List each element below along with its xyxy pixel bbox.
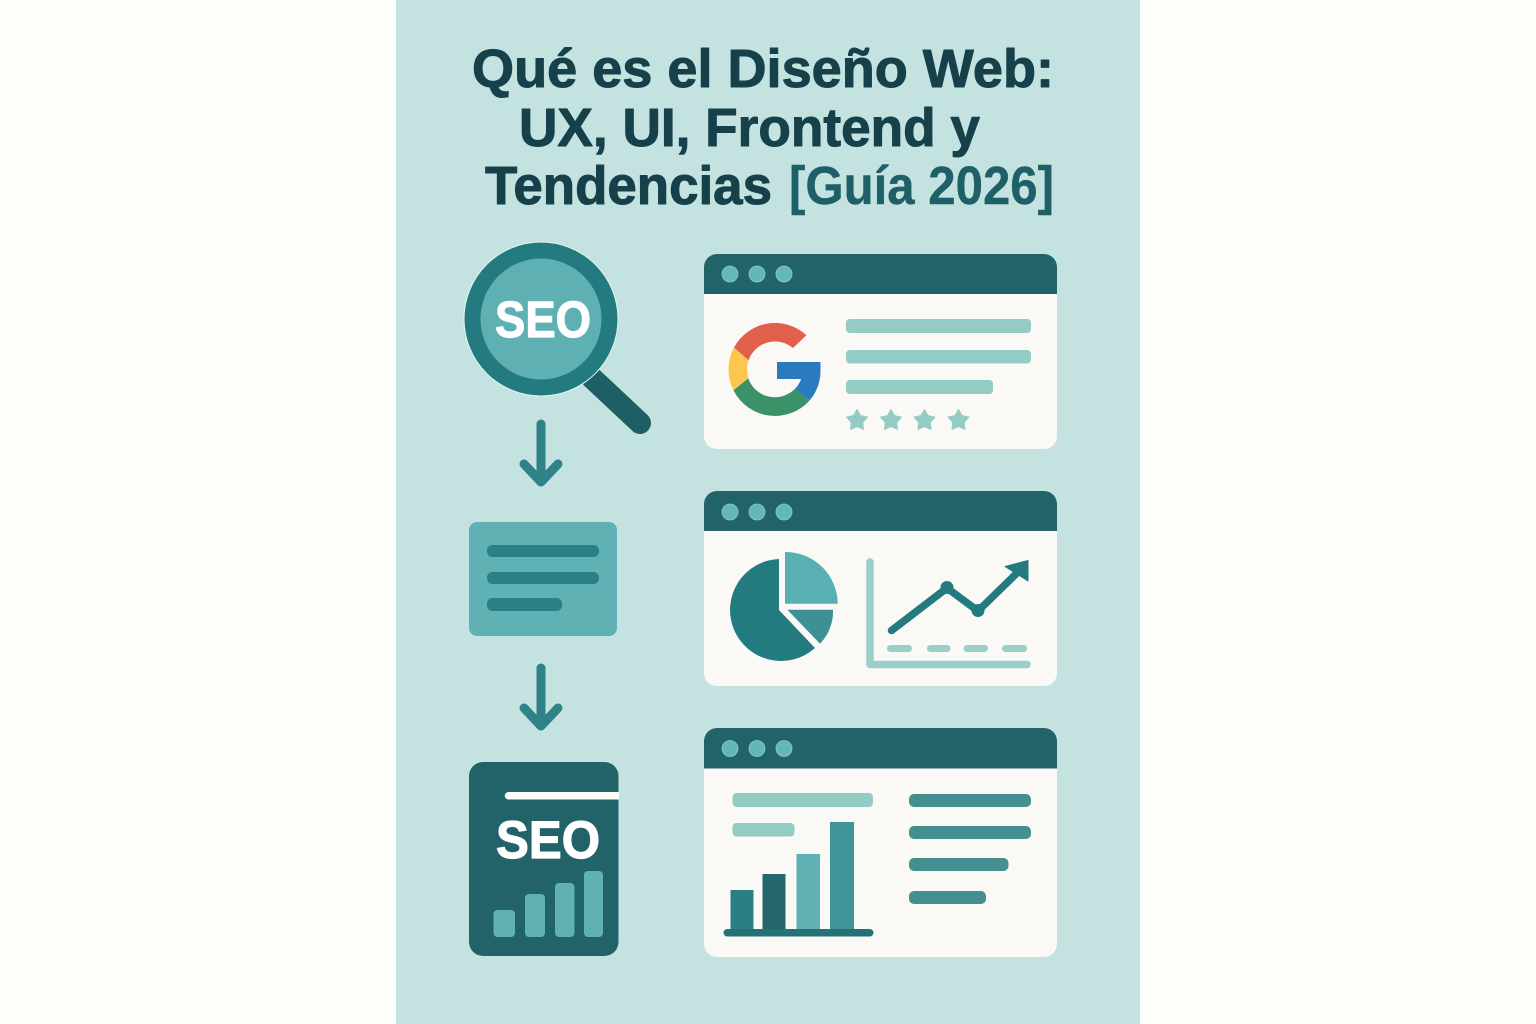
- icon: SEO magnifying glass: [464, 242, 640, 423]
- icon: Google G logo: [729, 323, 821, 416]
- title: [472, 39, 1054, 216]
- heading placeholder lines: [732, 793, 873, 836]
- text placeholder lines: [909, 794, 1031, 904]
- bar chart: [724, 822, 874, 936]
- pie chart: [730, 552, 838, 661]
- star rating: [846, 410, 969, 429]
- SEO report card: [469, 762, 619, 956]
- title: Tendencias: [485, 156, 772, 216]
- title: [Guía 2026]: [789, 156, 1054, 216]
- text card: [469, 522, 617, 636]
- line chart: [870, 560, 1028, 664]
- SEO report card: SEO: [496, 811, 600, 870]
- title: UX, UI, Frontend y: [519, 98, 980, 158]
- icon: SEO magnifying glass: SEO: [495, 291, 591, 348]
- arrow: text card to SEO report: [524, 668, 558, 726]
- panel: browser window with report: [704, 728, 1057, 957]
- panel: browser window with Google result: [704, 254, 1057, 449]
- report bar chart: [494, 871, 603, 937]
- central panel: [396, 0, 1140, 1024]
- search result lines: [846, 319, 1031, 394]
- arrow: magnifier to text card: [524, 424, 558, 482]
- title: Qué es el Diseño Web:: [472, 39, 1054, 99]
- panel: browser window with analytics: [704, 491, 1057, 686]
